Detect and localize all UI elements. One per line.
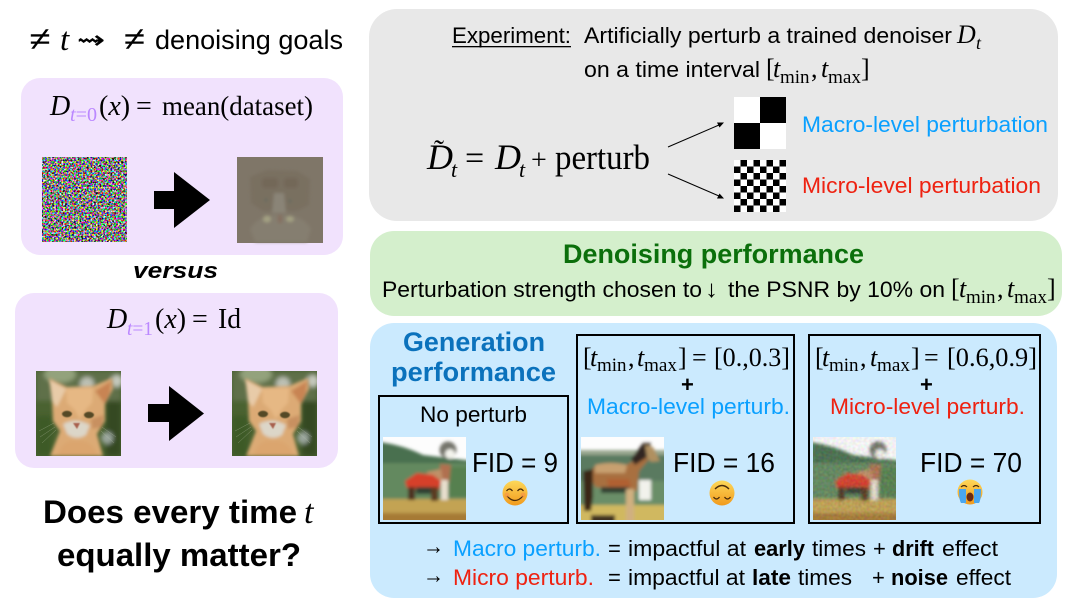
description: Perturbation strength chosen to bbox=[382, 277, 702, 302]
experiment description: [ bbox=[766, 54, 775, 83]
formula: D at t=0 equals mean of dataset bbox=[49, 91, 313, 126]
panel: denoising performance bbox=[370, 231, 1062, 316]
formula: D at t=0 equals mean of dataset: = bbox=[136, 91, 152, 122]
description: ] bbox=[1047, 274, 1056, 303]
heading: different t, different denoising goals: ≠ bbox=[124, 19, 145, 59]
image: cat output bbox=[232, 365, 319, 456]
formula: D at t=0 equals mean of dataset: t=0 bbox=[70, 104, 97, 126]
experiment description: , bbox=[811, 54, 818, 83]
experiment description: ] bbox=[861, 54, 870, 83]
experiment description: on a time interval bbox=[584, 57, 760, 82]
description: max bbox=[1014, 287, 1047, 308]
case: no perturbation bbox=[379, 396, 568, 527]
interval formula bbox=[583, 343, 790, 376]
image: noisy deer bbox=[813, 437, 896, 520]
takeaway: micro perturbation: noise bbox=[891, 565, 948, 590]
description: t bbox=[1007, 274, 1015, 303]
takeaway: micro perturbation: + bbox=[872, 565, 885, 590]
description: , bbox=[997, 274, 1004, 303]
interval formula: ] bbox=[678, 343, 687, 372]
takeaway: macro perturbation: effect bbox=[942, 536, 998, 561]
interval formula: = bbox=[924, 343, 939, 372]
interval formula: max bbox=[877, 355, 910, 376]
arrow: noise to mean bbox=[154, 172, 210, 228]
experiment description: Experiment: bbox=[452, 23, 571, 48]
interval formula: , bbox=[628, 343, 634, 372]
interval formula bbox=[815, 343, 1037, 376]
equation: perturbed denoiser: D bbox=[426, 137, 453, 177]
formula: D at t=1 equals identity: (x) bbox=[155, 304, 186, 335]
image: dataset mean bbox=[237, 157, 323, 243]
image: cat input bbox=[36, 365, 123, 456]
experiment description: Artificially perturb a trained denoiser bbox=[584, 23, 953, 48]
equation: perturbed denoiser: ˜ bbox=[434, 134, 444, 167]
interval formula: t bbox=[637, 343, 645, 372]
takeaway: micro perturbation: times bbox=[798, 565, 852, 590]
takeaway: micro perturbation bbox=[423, 562, 1011, 590]
case: micro perturbation: FID = 70 bbox=[920, 447, 1022, 478]
label: versus: versus bbox=[133, 258, 218, 283]
case: micro perturbation: Micro-level perturb. bbox=[830, 394, 1025, 419]
question: t bbox=[304, 494, 315, 531]
case: macro perturbation bbox=[577, 335, 794, 525]
interval formula: t bbox=[590, 343, 598, 372]
equation: perturbed denoiser: t bbox=[519, 157, 526, 182]
takeaway: micro perturbation: Micro perturb. bbox=[453, 565, 594, 590]
icon: crying emoji bbox=[958, 480, 982, 504]
icon: upside-down emoji bbox=[710, 480, 734, 506]
case: macro perturbation: Macro-level perturb. bbox=[587, 394, 790, 419]
case: micro perturbation bbox=[809, 335, 1040, 527]
interval formula: [ bbox=[815, 343, 824, 372]
panel: t=0 denoiser bbox=[21, 78, 343, 255]
heading: different t, different denoising goals: ⇝ bbox=[77, 26, 105, 54]
description bbox=[382, 274, 1056, 308]
takeaway: macro perturbation bbox=[423, 533, 998, 561]
icon: macro checkerboard bbox=[734, 97, 786, 149]
image: deer bbox=[383, 437, 466, 520]
interval formula: max bbox=[644, 355, 677, 376]
icon: micro checkerboard bbox=[734, 160, 786, 212]
interval formula: ] bbox=[911, 343, 920, 372]
heading: performance bbox=[391, 357, 556, 387]
interval formula: , bbox=[860, 343, 866, 372]
description: ↓ bbox=[705, 276, 718, 303]
takeaway: macro perturbation: early bbox=[754, 536, 806, 561]
panel: experiment bbox=[369, 9, 1058, 221]
arrow: to micro bbox=[668, 174, 724, 198]
equation: perturbed denoiser: t bbox=[451, 157, 458, 182]
interval formula: = bbox=[692, 343, 707, 372]
formula: D at t=0 equals mean of dataset: (x) bbox=[99, 91, 130, 122]
interval formula: t bbox=[870, 343, 878, 372]
takeaway: micro perturbation: = bbox=[608, 565, 621, 590]
takeaway: macro perturbation: impactful at bbox=[628, 536, 746, 561]
equation: perturbed denoiser: + bbox=[531, 145, 547, 176]
experiment description: t bbox=[976, 33, 982, 53]
heading: different t, different denoising goals: t bbox=[60, 22, 70, 58]
takeaway: micro perturbation: impactful at bbox=[628, 565, 745, 590]
case: micro perturbation: + bbox=[920, 372, 933, 397]
image: pure noise bbox=[42, 157, 127, 242]
formula: D at t=0 equals mean of dataset: mean(dataset) bbox=[162, 91, 313, 121]
heading: Denoising performance bbox=[563, 239, 864, 269]
description: min bbox=[966, 287, 996, 308]
interval formula: t bbox=[822, 343, 830, 372]
takeaway: macro perturbation: drift bbox=[892, 536, 935, 561]
case: macro perturbation: FID = 16 bbox=[673, 447, 775, 478]
heading: different t, different denoising goals bbox=[30, 19, 343, 59]
experiment description: max bbox=[828, 67, 861, 88]
case: no perturbation: No perturb bbox=[420, 402, 527, 427]
equation: perturbed denoiser bbox=[426, 134, 650, 182]
takeaway: micro perturbation: late bbox=[752, 565, 791, 590]
experiment description bbox=[452, 20, 982, 88]
takeaway: macro perturbation: + bbox=[873, 536, 886, 561]
takeaway: micro perturbation: → bbox=[423, 562, 444, 589]
experiment description: D bbox=[956, 20, 976, 49]
panel: t=1 denoiser bbox=[15, 293, 338, 468]
takeaway: macro perturbation: = bbox=[608, 536, 621, 561]
interval formula: [ bbox=[583, 343, 592, 372]
takeaway: macro perturbation: Macro perturb. bbox=[453, 536, 601, 561]
formula: D at t=1 equals identity: t=1 bbox=[127, 318, 153, 340]
interval formula: min bbox=[829, 355, 859, 376]
arrow: cat to cat bbox=[148, 386, 204, 441]
interval formula: [0.,0.3] bbox=[714, 343, 790, 372]
description: [ bbox=[951, 274, 960, 303]
description: the PSNR by 10% on bbox=[728, 277, 945, 302]
panel: generation performance bbox=[370, 323, 1057, 598]
interval formula: min bbox=[597, 355, 627, 376]
case: no perturbation: FID = 9 bbox=[472, 447, 558, 478]
equation: perturbed denoiser: perturb bbox=[555, 138, 650, 177]
experiment description: t bbox=[773, 54, 781, 83]
takeaway: macro perturbation: → bbox=[423, 533, 444, 560]
description: t bbox=[959, 274, 967, 303]
formula: D at t=0 equals mean of dataset: D bbox=[49, 91, 70, 122]
image: horse bbox=[581, 437, 664, 520]
case: macro perturbation: + bbox=[681, 372, 694, 397]
question bbox=[43, 494, 315, 573]
label: micro-level perturbation: Micro-level perturbation bbox=[802, 173, 1041, 198]
formula: D at t=1 equals identity bbox=[106, 304, 241, 340]
formula: D at t=1 equals identity: Id bbox=[218, 304, 241, 335]
arrow: to macro bbox=[668, 122, 724, 147]
experiment description: t bbox=[821, 54, 829, 83]
question: Does every time bbox=[43, 494, 297, 530]
takeaway: micro perturbation: effect bbox=[956, 565, 1011, 590]
label: macro-level perturbation: Macro-level perturbation bbox=[802, 112, 1048, 137]
heading bbox=[391, 327, 556, 387]
interval formula: [0.6,0.9] bbox=[947, 343, 1037, 372]
heading: Generation bbox=[403, 327, 545, 357]
icon: smiling emoji bbox=[502, 480, 528, 506]
formula: D at t=1 equals identity: D bbox=[106, 304, 127, 335]
heading: different t, different denoising goals: denoising goals bbox=[155, 25, 343, 55]
heading: different t, different denoising goals: ≠ bbox=[30, 19, 50, 59]
equation: perturbed denoiser: D bbox=[494, 137, 521, 177]
experiment description: min bbox=[780, 67, 810, 88]
equation: perturbed denoiser: = bbox=[465, 140, 484, 177]
question: equally matter? bbox=[57, 537, 301, 573]
formula: D at t=1 equals identity: = bbox=[192, 304, 208, 335]
takeaway: macro perturbation: times bbox=[812, 536, 866, 561]
